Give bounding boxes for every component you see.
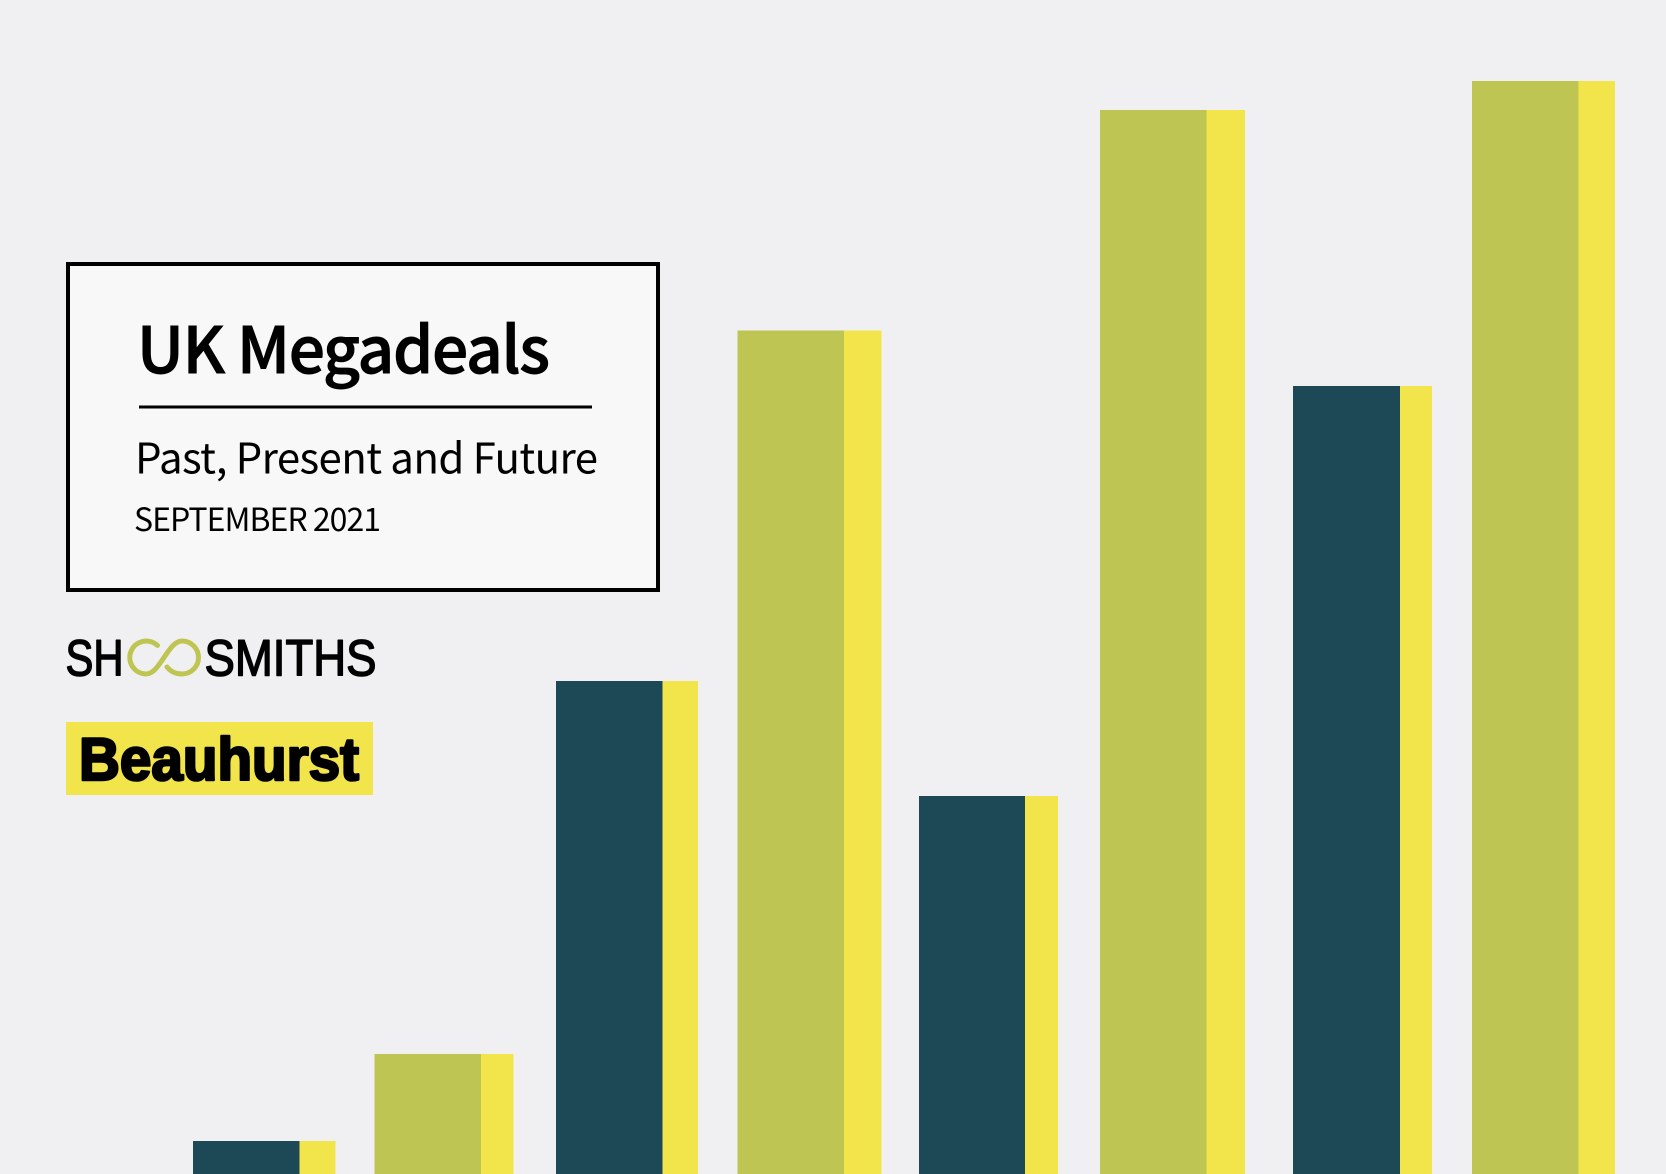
panel: title box <box>68 264 658 590</box>
bar 4: olive <box>738 330 882 1174</box>
logo letters: SH: SH <box>66 630 124 686</box>
bar 2: olive <box>374 1054 514 1174</box>
subtitle: Past, Present and Future <box>135 426 598 486</box>
bar 7: teal <box>1293 386 1432 1174</box>
bar 6: olive <box>1100 110 1245 1174</box>
logo letters: SMITHS: SMITHS <box>204 630 376 686</box>
title: UK Megadeals <box>137 300 550 392</box>
date: SEPTEMBER 2021 <box>134 495 381 541</box>
logo: Beauhurst <box>66 722 373 795</box>
bar chart <box>193 81 1615 1174</box>
bar 5: teal <box>919 796 1058 1174</box>
divider rule <box>139 406 592 408</box>
logo wordmark: Beauhurst <box>79 726 359 793</box>
bar 3: teal <box>556 681 698 1174</box>
bar 1: teal <box>193 1141 336 1174</box>
logo icon: infinity <box>130 641 198 674</box>
logo: Shoosmiths <box>66 630 376 686</box>
bar 8: olive <box>1472 81 1615 1174</box>
